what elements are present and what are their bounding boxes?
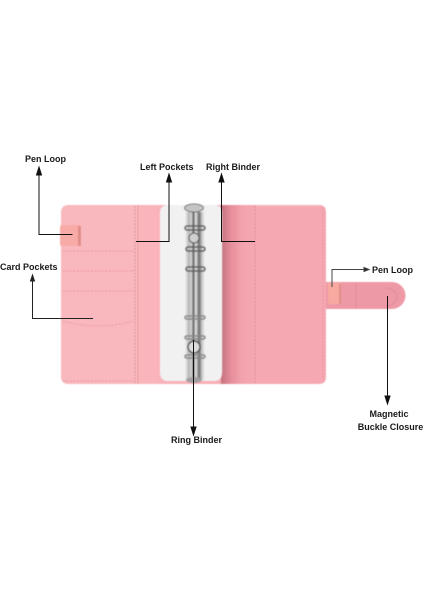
strap: magnetic buckle: [326, 282, 406, 309]
binder cover: [61, 205, 326, 384]
arrow: left pockets: [136, 174, 172, 242]
label: magnetic buckle closure: Buckle Closure: [358, 422, 423, 432]
label: pen loop right: Pen Loop: [372, 265, 413, 275]
arrow: right binder: [219, 174, 255, 242]
label: pen loop left: Pen Loop: [25, 154, 66, 164]
left pockets panel: [61, 205, 138, 384]
arrow: card pockets: [30, 275, 93, 318]
label: ring binder: Ring Binder: [171, 435, 222, 445]
arrow: pen loop right: [332, 268, 369, 287]
binder photo: [60, 204, 406, 384]
arrow: ring binder: [191, 340, 196, 435]
label: magnetic buckle closure: Magnetic: [369, 409, 409, 419]
ring binder: [184, 204, 205, 383]
right pen loop: [328, 283, 341, 304]
label: left pockets: Left Pockets: [140, 162, 194, 172]
right binder panel: [221, 205, 323, 384]
label: card pockets: Card Pockets: [0, 262, 58, 272]
arrow: magnetic buckle: [385, 296, 390, 404]
card pockets: [63, 251, 134, 381]
label: right binder: Right Binder: [206, 162, 260, 172]
left pen loop: [60, 225, 81, 246]
centre gutter: [137, 205, 255, 384]
arrow: pen loop left: [36, 167, 72, 234]
white insert pages: [160, 205, 222, 381]
